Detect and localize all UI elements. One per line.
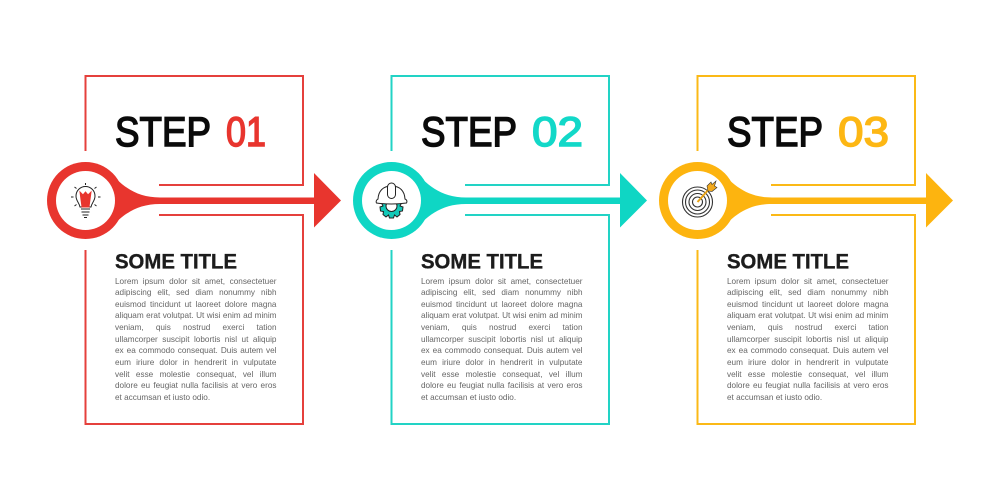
body text: aliquam erat volutpat. Ut wisi enim ad minim xyxy=(421,311,582,320)
body text: ex ea commodo consequat. Duis autem vel xyxy=(727,346,888,355)
body text: euismod tincidunt ut laoreet dolore magna xyxy=(421,300,582,309)
body text: dolore eu feugiat nulla facilisis at vero eros xyxy=(421,381,582,390)
body text: eum iriure dolor in hendrerit in vulputate xyxy=(115,358,276,367)
pin inner circle xyxy=(362,171,421,230)
title: SOME TITLE xyxy=(115,250,237,274)
body text: ullamcorper suscipit lobortis nisl ut aliquip xyxy=(421,335,582,344)
panel: step 03 xyxy=(659,75,953,425)
heading: step 03 xyxy=(727,108,889,155)
body text: aliquam erat volutpat. Ut wisi enim ad minim xyxy=(727,311,888,320)
arrow with pin xyxy=(353,162,647,239)
body text: ullamcorper suscipit lobortis nisl ut aliquip xyxy=(727,335,888,344)
body text: ex ea commodo consequat. Duis autem vel xyxy=(115,346,276,355)
body text: veniam, quis nostrud exerci tation xyxy=(115,323,276,332)
body text: Lorem ipsum dolor sit amet, consectetuer xyxy=(421,276,582,286)
pin inner circle xyxy=(668,171,727,230)
panel: step 02 xyxy=(353,75,647,425)
heading: step 01: STEP xyxy=(115,108,211,155)
body text: et accumsan et iusto odio. xyxy=(727,393,822,402)
body text: adipiscing elit, sed diam nonummy nibh xyxy=(421,288,582,297)
heading: step 02: STEP xyxy=(421,108,517,155)
body text: adipiscing elit, sed diam nonummy nibh xyxy=(727,288,888,297)
body text: velit esse molestie consequat, vel illum xyxy=(115,370,276,379)
body text: Lorem ipsum dolor sit amet, consectetuer xyxy=(727,276,888,286)
body text: ullamcorper suscipit lobortis nisl ut aliquip xyxy=(115,335,276,344)
heading: step 03: STEP xyxy=(727,108,823,155)
body text: et accumsan et iusto odio. xyxy=(115,393,210,402)
body text: velit esse molestie consequat, vel illum xyxy=(727,370,888,379)
body text: Lorem ipsum dolor sit amet, consectetuer xyxy=(115,276,276,286)
body text: ex ea commodo consequat. Duis autem vel xyxy=(421,346,582,355)
body text: veniam, quis nostrud exerci tation xyxy=(421,323,582,332)
body text: et accumsan et iusto odio. xyxy=(421,393,516,402)
body text: eum iriure dolor in hendrerit in vulputate xyxy=(727,358,888,367)
body text: adipiscing elit, sed diam nonummy nibh xyxy=(115,288,276,297)
body text: veniam, quis nostrud exerci tation xyxy=(727,323,888,332)
icon: target with dart xyxy=(682,181,717,217)
body text: aliquam erat volutpat. Ut wisi enim ad minim xyxy=(115,311,276,320)
body text xyxy=(727,276,888,402)
panel: step 01 xyxy=(47,75,341,425)
body text: euismod tincidunt ut laoreet dolore magna xyxy=(727,300,888,309)
body text: eum iriure dolor in hendrerit in vulputate xyxy=(421,358,582,367)
body text: dolore eu feugiat nulla facilisis at vero eros xyxy=(727,381,888,390)
arrow with pin xyxy=(659,162,953,239)
heading: step 01: 01 xyxy=(226,108,266,155)
body text: velit esse molestie consequat, vel illum xyxy=(421,370,582,379)
icon: helmet and gear xyxy=(376,183,407,218)
heading: step 02 xyxy=(421,108,583,155)
heading: step 02: 02 xyxy=(532,108,583,155)
arrow with pin xyxy=(47,162,341,239)
body text: dolore eu feugiat nulla facilisis at vero eros xyxy=(115,381,276,390)
body text: euismod tincidunt ut laoreet dolore magna xyxy=(115,300,276,309)
upper frame xyxy=(698,76,915,185)
lower frame xyxy=(86,215,303,424)
icon: light bulb xyxy=(71,183,100,218)
upper frame xyxy=(392,76,609,185)
heading: step 03: 03 xyxy=(838,108,889,155)
title: SOME TITLE xyxy=(421,250,543,274)
lower frame xyxy=(392,215,609,424)
upper frame xyxy=(86,76,303,185)
pin inner circle xyxy=(56,171,115,230)
body text xyxy=(115,276,276,402)
body text xyxy=(421,276,582,402)
lower frame xyxy=(698,215,915,424)
title: SOME TITLE xyxy=(727,250,849,274)
